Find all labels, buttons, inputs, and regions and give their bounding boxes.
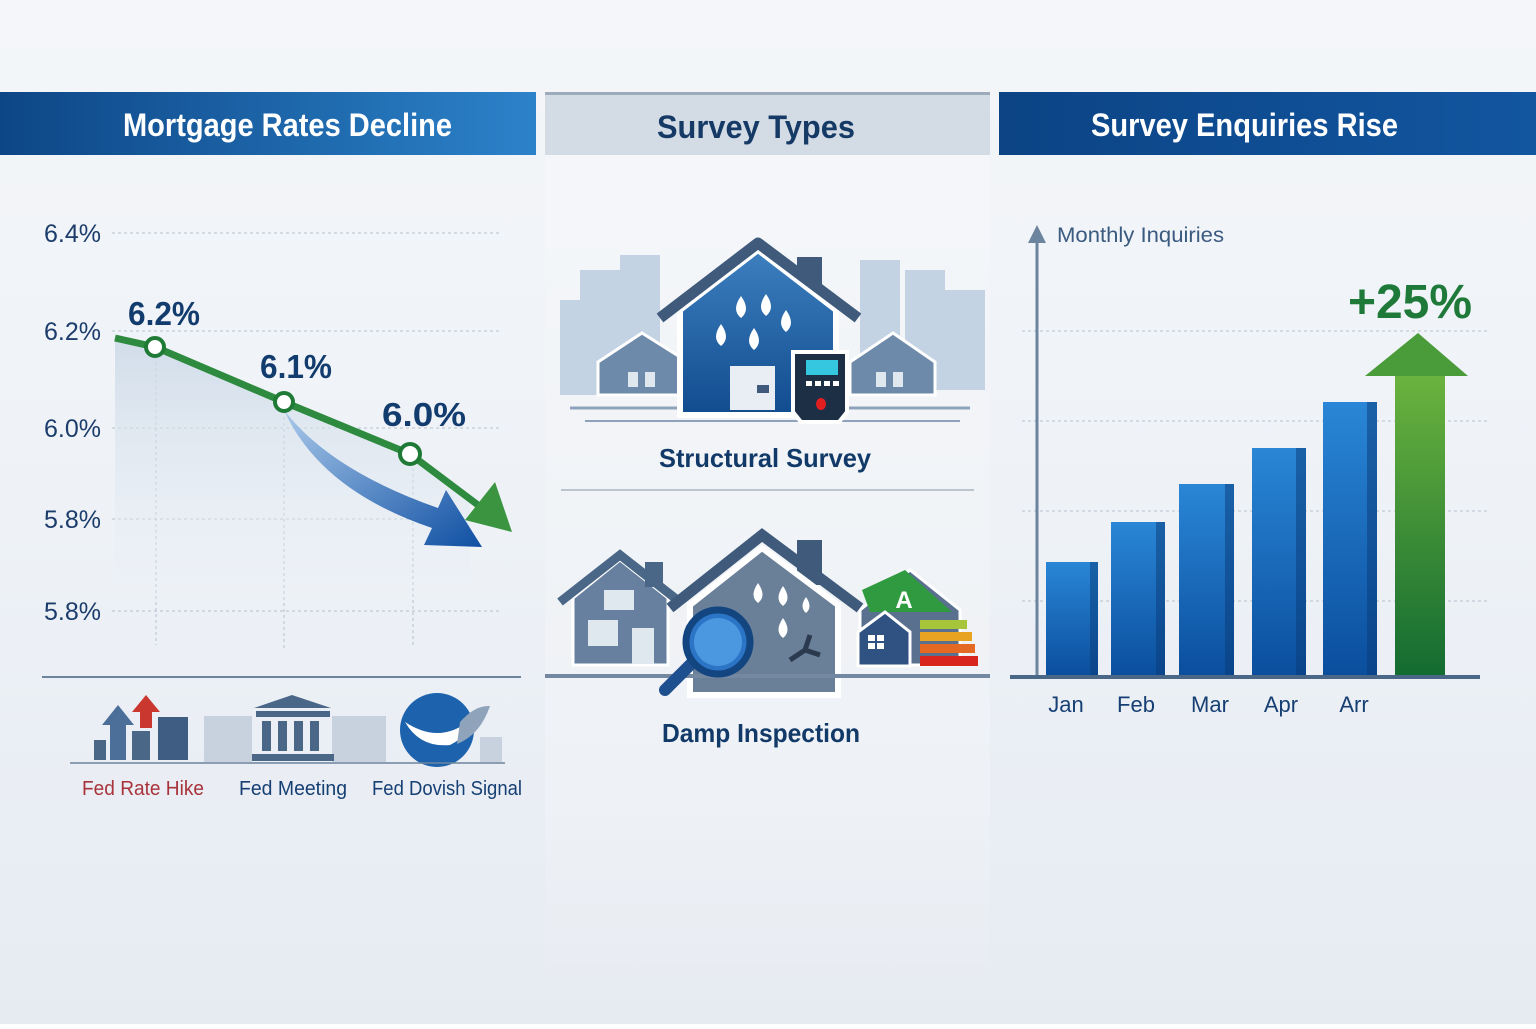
panel: mortgage rates (0, 92, 536, 800)
label: fed rate hike: Fed Rate Hike (82, 778, 204, 800)
heading: Mortgage Rates Decline (0, 92, 536, 155)
heading: Survey Types: Survey Types (657, 109, 855, 145)
bar chart: Monthly Inquiries (1057, 224, 1224, 247)
heading: Survey Enquiries Rise: Survey Enquiries Rise (1091, 107, 1398, 143)
panel: survey types background (545, 92, 990, 982)
heading: Survey Enquiries Rise (999, 92, 1536, 155)
heading: Survey Types (545, 92, 990, 155)
panel: survey types (545, 92, 990, 748)
line chart: 6.2% (44, 318, 101, 346)
icon: structural survey houses (560, 243, 985, 422)
bar chart: Apr (1264, 692, 1298, 717)
line chart: 6.4% (44, 220, 101, 248)
line chart (44, 220, 512, 650)
panel: survey enquiries (999, 92, 1536, 717)
line chart: 5.8% (44, 598, 101, 626)
arrow: +25% growth (1365, 333, 1468, 676)
bar chart: Feb (1117, 692, 1155, 717)
icon: dove (400, 693, 502, 767)
icon: fed rate hike (94, 695, 188, 760)
line chart: 6.1% (260, 348, 332, 385)
line chart: 6.2% (128, 295, 200, 332)
icon: fed meeting (204, 695, 386, 762)
icon: damp inspection houses (545, 535, 990, 695)
bar chart: Mar (1191, 692, 1229, 717)
label: structural survey: Structural Survey (659, 443, 872, 473)
line chart: 6.0% (382, 396, 466, 433)
label: fed meeting: Fed Meeting (239, 778, 347, 800)
bar chart: +25% (1348, 276, 1472, 329)
bar chart: Jan (1048, 692, 1084, 717)
heading: Mortgage Rates Decline: Mortgage Rates Decline (123, 107, 452, 143)
bar chart (1010, 224, 1490, 717)
line chart: 6.0% (44, 415, 101, 443)
bar chart: Arr (1339, 692, 1369, 717)
label: fed dovish signal: Fed Dovish Signal (372, 778, 522, 800)
icon: damp inspection houses: A (895, 587, 913, 614)
label: damp inspection: Damp Inspection (662, 718, 860, 748)
line chart: 5.8% (44, 506, 101, 534)
